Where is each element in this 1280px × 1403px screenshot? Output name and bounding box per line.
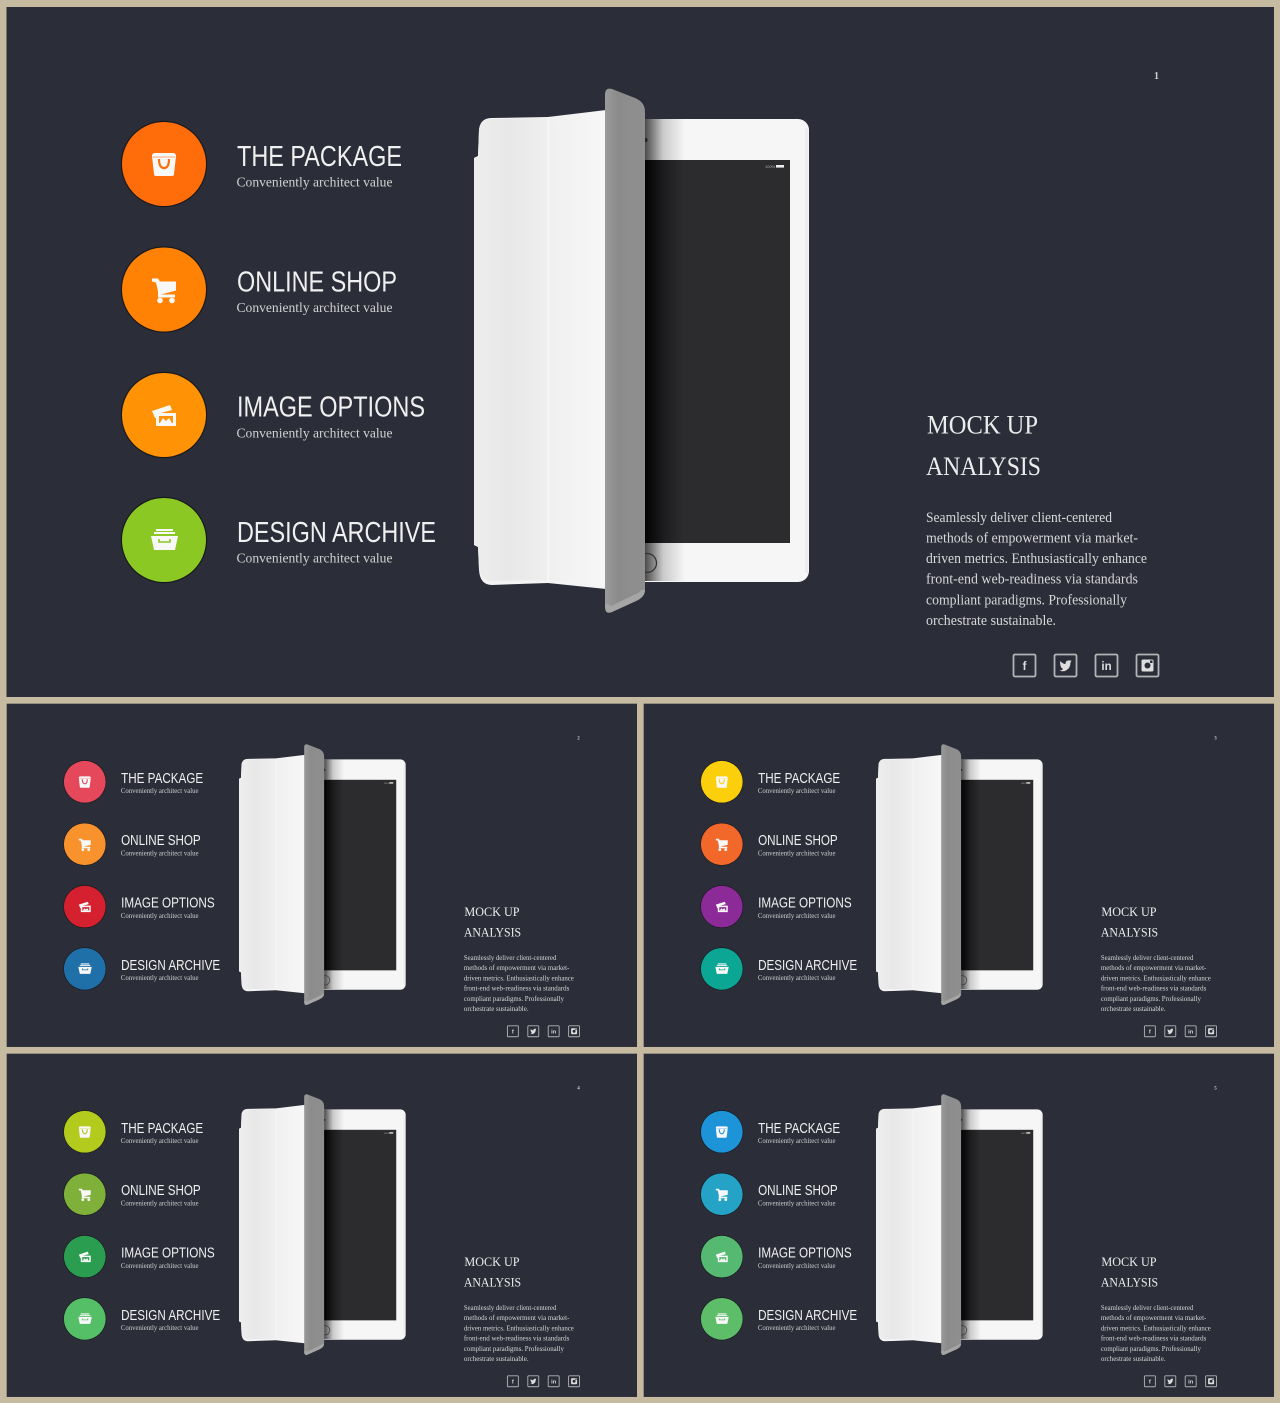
heading: the package: Conveniently architect value	[758, 1137, 835, 1145]
text block: description: compliant paradigms. Professionally	[926, 592, 1128, 608]
heading: online shop	[121, 1183, 201, 1207]
heading: the package: Conveniently architect value	[236, 176, 392, 190]
heading: the package: Conveniently architect value	[121, 1137, 198, 1145]
text block: description: compliant paradigms. Professionally	[464, 1345, 564, 1353]
icon: twitter	[528, 1026, 539, 1037]
heading: mock up analysis	[464, 904, 521, 940]
heading: online shop: ONLINE SHOP	[121, 1183, 201, 1199]
icon: twitter	[1054, 654, 1076, 676]
heading: online shop: Conveniently architect value	[121, 1199, 198, 1207]
text block: description: Seamlessly deliver client-centered	[1101, 954, 1194, 962]
heading: design archive: Conveniently architect value	[121, 1324, 198, 1332]
heading: the package: THE PACKAGE	[237, 141, 402, 173]
heading: design archive	[121, 958, 220, 982]
text block: description	[1101, 1304, 1211, 1363]
icon: linkedin: in	[1188, 1380, 1194, 1386]
icon: linkedin	[1096, 654, 1118, 676]
icon: lime bag circle	[64, 1111, 106, 1153]
text block: description: Seamlessly deliver client-centered	[1101, 1304, 1194, 1312]
text block: description: methods of empowerment via market-	[1101, 1314, 1207, 1322]
text block: description: Seamlessly deliver client-centered	[926, 510, 1113, 526]
icon: facebook: f	[1023, 661, 1027, 673]
heading: online shop: Conveniently architect value	[758, 1199, 835, 1207]
heading: image options	[758, 895, 852, 920]
icon: green archive circle	[122, 498, 206, 582]
heading: image options: IMAGE OPTIONS	[758, 1245, 852, 1261]
icon: facebook	[1144, 1376, 1155, 1387]
icon: teal archive circle	[701, 948, 743, 990]
heading: design archive: Conveniently architect value	[758, 974, 835, 982]
text block: description: orchestrate sustainable.	[1101, 1355, 1166, 1363]
heading: image options: Conveniently architect value	[758, 1262, 835, 1270]
text block: description: methods of empowerment via market-	[464, 964, 570, 972]
icon: green image circle	[64, 1236, 106, 1278]
heading: image options: Conveniently architect value	[121, 1262, 198, 1270]
heading: design archive	[121, 1308, 220, 1332]
icon: linkedin: in	[551, 1030, 557, 1036]
text block: description: driven metrics. Enthusiastically enhance	[1101, 974, 1211, 982]
icon: twitter	[528, 1376, 539, 1387]
heading: design archive	[758, 1308, 857, 1332]
icon: amber image circle	[122, 373, 206, 457]
heading: online shop	[758, 833, 838, 857]
text block: description	[464, 954, 574, 1013]
heading: design archive: DESIGN ARCHIVE	[758, 958, 857, 974]
icon: facebook	[507, 1026, 518, 1037]
panel: slide 5 blue green	[644, 1054, 1274, 1397]
heading: the package	[121, 771, 203, 795]
text block: description: compliant paradigms. Professionally	[464, 995, 564, 1003]
heading: mock up analysis: MOCK UP	[464, 1254, 520, 1269]
heading: mock up analysis	[1101, 904, 1158, 940]
heading: mock up analysis: ANALYSIS	[926, 452, 1041, 481]
heading: the package	[121, 1121, 203, 1145]
heading: online shop: ONLINE SHOP	[237, 266, 397, 298]
page number: 3	[1214, 737, 1217, 742]
icon: facebook: f	[512, 1380, 514, 1386]
heading: image options: Conveniently architect value	[121, 912, 198, 920]
icon: orange cart circle	[64, 823, 106, 865]
icon: facebook	[1144, 1026, 1155, 1037]
icon: instagram	[569, 1376, 580, 1387]
heading: the package: THE PACKAGE	[121, 1121, 203, 1137]
icon: linkedin: in	[551, 1380, 557, 1386]
icon: facebook: f	[1149, 1030, 1151, 1036]
heading: design archive	[236, 517, 436, 566]
icon: facebook: f	[1149, 1380, 1151, 1386]
icon: red bag circle	[64, 761, 106, 803]
heading: mock up analysis	[926, 410, 1041, 481]
text block: description	[926, 510, 1147, 629]
icon: facebook: f	[512, 1030, 514, 1036]
text block: description: driven metrics. Enthusiastically enhance	[1101, 1324, 1211, 1332]
heading: image options: Conveniently architect value	[236, 426, 392, 442]
heading: the package: Conveniently architect value	[121, 787, 198, 795]
heading: online shop: Conveniently architect value	[236, 301, 392, 316]
icon: linkedin: in	[1188, 1030, 1194, 1036]
page number: 2	[577, 737, 580, 742]
heading: the package	[758, 1121, 840, 1145]
heading: image options	[758, 1245, 852, 1270]
heading: online shop: ONLINE SHOP	[121, 833, 201, 849]
heading: image options	[121, 1245, 215, 1270]
heading: design archive: DESIGN ARCHIVE	[121, 1308, 220, 1324]
text block: description: orchestrate sustainable.	[926, 613, 1056, 629]
tablet mockup	[474, 89, 809, 613]
text block: description: orchestrate sustainable.	[1101, 1005, 1166, 1013]
icon: facebook	[507, 1376, 518, 1387]
text block: description: compliant paradigms. Professionally	[1101, 1345, 1201, 1353]
heading: the package	[236, 141, 402, 190]
heading: image options	[121, 895, 215, 920]
icon: orange cart circle	[701, 823, 743, 865]
icon: blue archive circle	[64, 948, 106, 990]
text block: description: driven metrics. Enthusiastically enhance	[926, 551, 1147, 567]
text block: description: front-end web-readiness via standards	[464, 985, 570, 993]
text block: description: front-end web-readiness via standards	[1101, 985, 1207, 993]
heading: image options: IMAGE OPTIONS	[121, 1245, 215, 1261]
text block: description: front-end web-readiness via standards	[926, 572, 1138, 588]
panel: slide 4 greens	[7, 1054, 637, 1397]
heading: the package: THE PACKAGE	[758, 771, 840, 787]
heading: design archive: DESIGN ARCHIVE	[121, 958, 220, 974]
heading: image options: Conveniently architect value	[758, 912, 835, 920]
icon: instagram	[1206, 1376, 1217, 1387]
heading: online shop: Conveniently architect value	[121, 849, 198, 857]
heading: design archive: DESIGN ARCHIVE	[237, 517, 436, 549]
heading: image options: IMAGE OPTIONS	[758, 895, 852, 911]
icon: instagram	[569, 1026, 580, 1037]
text block: description: methods of empowerment via market-	[464, 1314, 570, 1322]
text block: description: front-end web-readiness via standards	[1101, 1335, 1207, 1343]
heading: mock up analysis	[1101, 1254, 1158, 1290]
heading: mock up analysis: MOCK UP	[1101, 1254, 1157, 1269]
icon: crimson image circle	[64, 886, 106, 928]
icon: orange cart circle	[122, 248, 206, 332]
icon: green archive circle	[701, 1298, 743, 1340]
icon: light green archive circle	[64, 1298, 106, 1340]
text block: description: driven metrics. Enthusiastically enhance	[464, 974, 574, 982]
heading: mock up analysis	[464, 1254, 521, 1290]
heading: design archive: Conveniently architect value	[236, 552, 392, 566]
heading: mock up analysis: ANALYSIS	[464, 1275, 521, 1290]
text block: description: Seamlessly deliver client-centered	[464, 1304, 557, 1312]
tablet mockup	[239, 1094, 406, 1355]
heading: design archive: DESIGN ARCHIVE	[758, 1308, 857, 1324]
heading: mock up analysis: ANALYSIS	[1101, 1275, 1158, 1290]
page number: 5	[1214, 1087, 1217, 1092]
heading: mock up analysis: MOCK UP	[464, 904, 520, 919]
page number: 1	[1154, 71, 1159, 82]
text block: description: methods of empowerment via market-	[1101, 964, 1207, 972]
icon: purple image circle	[701, 886, 743, 928]
heading: the package: THE PACKAGE	[121, 771, 203, 787]
heading: online shop: ONLINE SHOP	[758, 833, 838, 849]
heading: the package: THE PACKAGE	[758, 1121, 840, 1137]
panel: slide 2 red orange blue	[7, 704, 637, 1047]
heading: image options: IMAGE OPTIONS	[237, 392, 425, 424]
heading: mock up analysis: MOCK UP	[1101, 904, 1157, 919]
heading: the package: Conveniently architect value	[758, 787, 835, 795]
text block: description: methods of empowerment via market-	[926, 530, 1138, 546]
icon: instagram	[1136, 654, 1158, 676]
heading: online shop	[758, 1183, 838, 1207]
icon: blue bag circle	[701, 1111, 743, 1153]
heading: online shop	[121, 833, 201, 857]
text block: description	[464, 1304, 574, 1363]
panel: slide 3 yellow purple teal	[644, 704, 1274, 1047]
text block: description	[1101, 954, 1211, 1013]
heading: design archive: Conveniently architect value	[121, 974, 198, 982]
heading: mock up analysis: MOCK UP	[927, 410, 1038, 440]
tablet mockup	[239, 744, 406, 1005]
heading: online shop: ONLINE SHOP	[758, 1183, 838, 1199]
icon: instagram	[1206, 1026, 1217, 1037]
icon: twitter	[1165, 1376, 1176, 1387]
heading: the package	[758, 771, 840, 795]
tablet mockup	[876, 744, 1043, 1005]
text block: description: Seamlessly deliver client-centered	[464, 954, 557, 962]
icon: linkedin	[548, 1376, 559, 1387]
icon: linkedin: in	[1101, 661, 1112, 673]
heading: online shop: Conveniently architect value	[758, 849, 835, 857]
icon: twitter	[1165, 1026, 1176, 1037]
icon: cyan cart circle	[701, 1173, 743, 1215]
icon: linkedin	[548, 1026, 559, 1037]
heading: design archive: Conveniently architect value	[758, 1324, 835, 1332]
heading: image options: IMAGE OPTIONS	[121, 895, 215, 911]
text block: description: front-end web-readiness via standards	[464, 1335, 570, 1343]
icon: linkedin	[1185, 1026, 1196, 1037]
heading: image options	[236, 392, 425, 442]
text block: description: orchestrate sustainable.	[464, 1005, 529, 1013]
icon: facebook	[1014, 654, 1036, 676]
icon: olive green cart circle	[64, 1173, 106, 1215]
page number: 4	[577, 1087, 580, 1092]
text block: description: orchestrate sustainable.	[464, 1355, 529, 1363]
icon: orange bag circle	[122, 122, 206, 206]
heading: mock up analysis: ANALYSIS	[464, 925, 521, 940]
icon: yellow bag circle	[701, 761, 743, 803]
text block: description: driven metrics. Enthusiastically enhance	[464, 1324, 574, 1332]
heading: online shop	[236, 266, 397, 316]
panel: main slide	[6, 7, 1274, 697]
icon: green image circle	[701, 1236, 743, 1278]
heading: design archive	[758, 958, 857, 982]
icon: linkedin	[1185, 1376, 1196, 1387]
heading: mock up analysis: ANALYSIS	[1101, 925, 1158, 940]
text block: description: compliant paradigms. Professionally	[1101, 995, 1201, 1003]
tablet mockup	[876, 1094, 1043, 1355]
